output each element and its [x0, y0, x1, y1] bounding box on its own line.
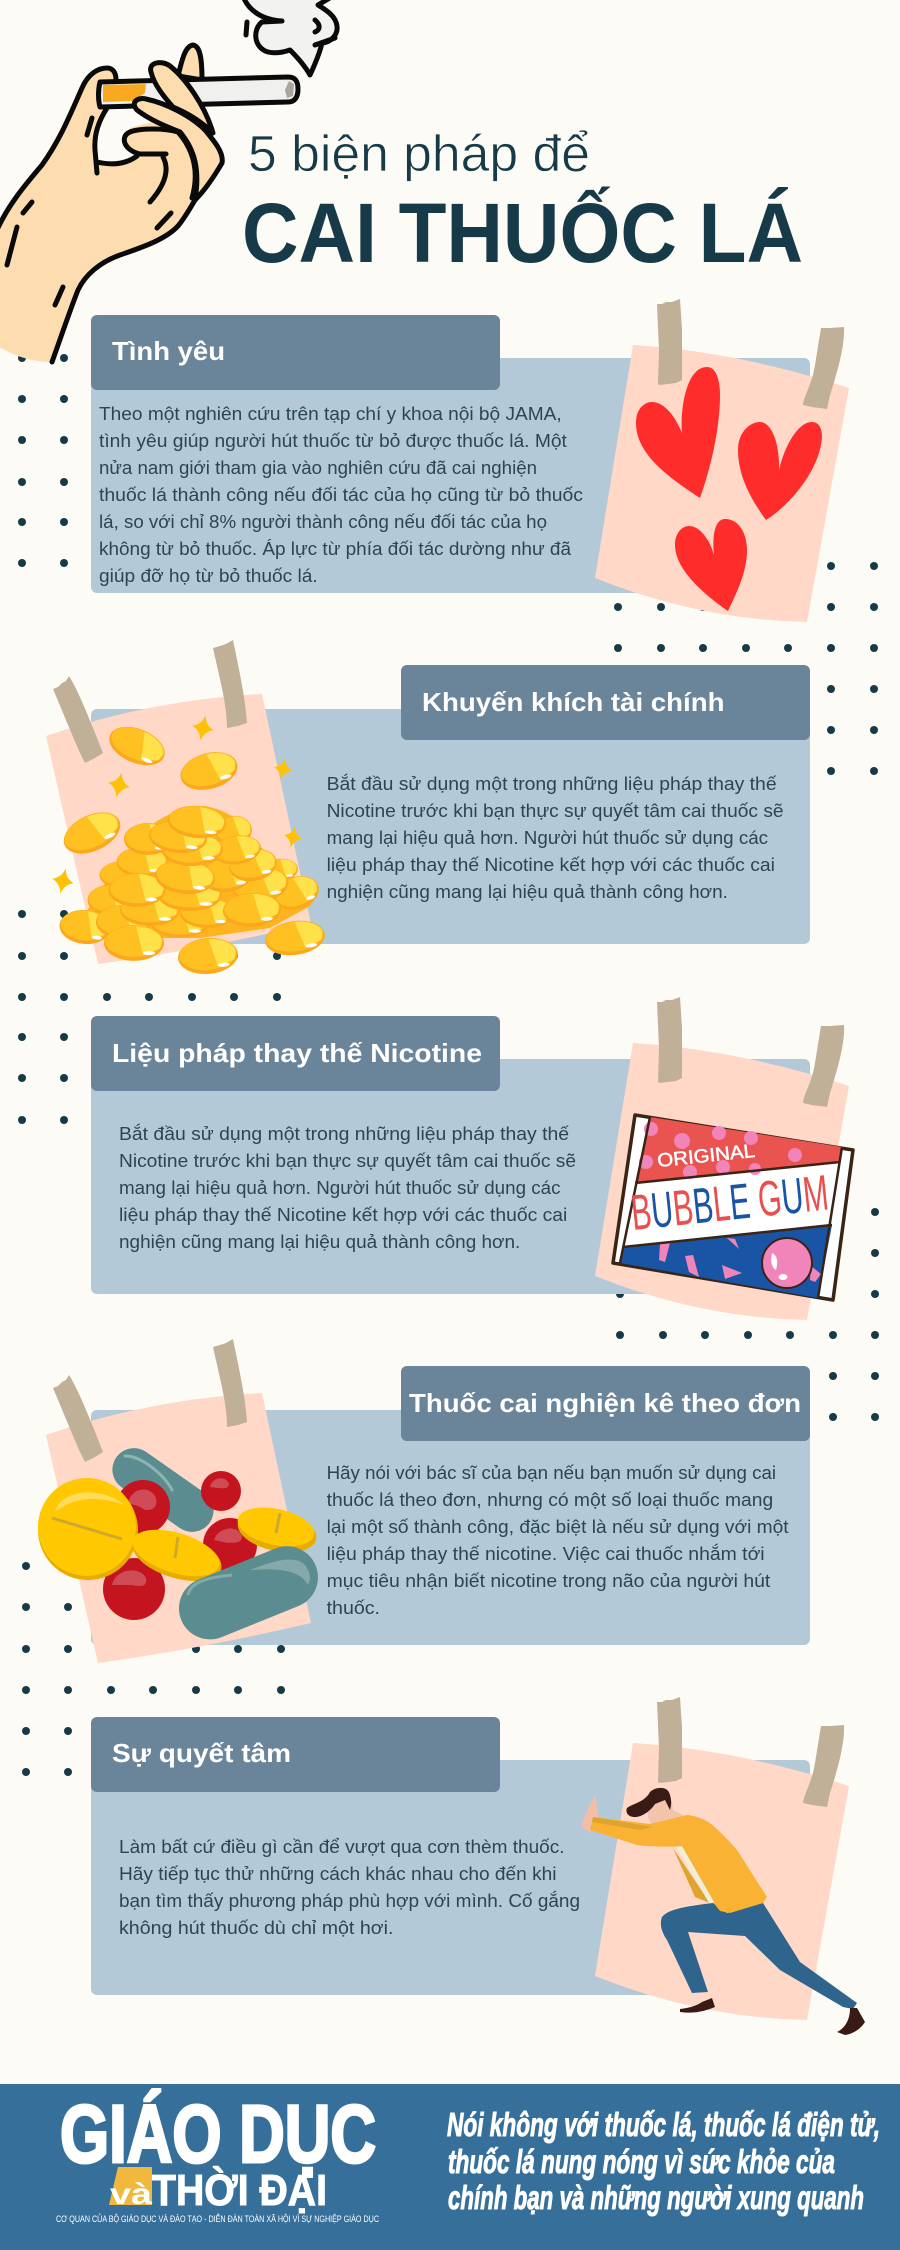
heading: Tình yêu — [91, 315, 500, 390]
text block: Liệu pháp thay thế Nicotine: mang lại hiệu quả hơn. Người hút thuốc sử dụng các — [119, 1177, 560, 1198]
panel: Khuyến khích tài chính — [46, 640, 810, 976]
title: 5 biện pháp để — [248, 125, 590, 182]
icon: bubble gum pack: BUBBLE GUM — [628, 1165, 831, 1241]
heading: Sự quyết tâm: Sự quyết tâm — [112, 1738, 291, 1768]
text block: Khuyến khích tài chính: Nicotine trước khi bạn thực sự quyết tâm cai thuốc sẽ — [327, 800, 784, 821]
panel: Thuốc cai nghiện kê theo đơn — [38, 1339, 810, 1663]
text block: Khuyến khích tài chính: Bắt đầu sử dụng một trong những liệu pháp thay thế — [327, 773, 777, 794]
text block: Sự quyết tâm: không hút thuốc dù chỉ một hơi. — [119, 1917, 393, 1938]
text block: Liệu pháp thay thế Nicotine: Bắt đầu sử dụng một trong những liệu pháp thay thế — [119, 1123, 570, 1144]
text block: Thuốc cai nghiện kê theo đơn: thuốc lá theo đơn, nhưng có một số loại thuốc mang — [327, 1489, 773, 1510]
text block: Thuốc cai nghiện kê theo đơn: mục tiêu nhận biết nicotine trong não của người hút — [327, 1570, 770, 1591]
panel: Tình yêu — [91, 299, 849, 622]
icon: pills — [38, 1440, 327, 1649]
text block: Khuyến khích tài chính — [327, 773, 784, 902]
text block: Tình yêu: Theo một nghiên cứu trên tạp chí y khoa nội bộ JAMA, — [99, 403, 562, 424]
yellow box — [109, 2167, 152, 2205]
text block: Liệu pháp thay thế Nicotine: nghiện cũng mang lại hiệu quả thành công hơn. — [119, 1231, 520, 1252]
text block: Tình yêu: nửa nam giới tham gia vào nghiên cứu đã cai nghiện — [99, 457, 537, 478]
logo: Giáo dục và Thời đại: CƠ QUAN CỦA BỘ GIÁO DỤC VÀ ĐÀO TẠO - DIỄN ĐÀN TOÀN XÃ HỘI VÌ SỰ NGHIỆP GIÁO DỤC — [56, 2213, 379, 2225]
icon: hand holding cigarette — [0, 45, 298, 362]
footer band — [0, 2084, 900, 2250]
text block: Liệu pháp thay thế Nicotine: Nicotine trước khi bạn thực sự quyết tâm cai thuốc sẽ — [119, 1150, 576, 1171]
text block: Thuốc cai nghiện kê theo đơn — [327, 1462, 789, 1618]
icon: smoke cloud — [243, 0, 337, 75]
heading: Liệu pháp thay thế Nicotine: Liệu pháp thay thế Nicotine — [112, 1038, 482, 1068]
icon: bubble gum pack: ORIGINAL — [656, 1141, 756, 1172]
logo: Giáo dục và Thời đại: THỜI ĐẠI — [152, 2165, 327, 2215]
logo: Giáo dục và Thời đại — [56, 2089, 379, 2225]
text block: Thuốc cai nghiện kê theo đơn: liệu pháp thay thế nicotine. Việc cai thuốc nhắm tới — [327, 1543, 765, 1564]
heading: Khuyến khích tài chính — [401, 665, 810, 740]
text block: Thuốc cai nghiện kê theo đơn: thuốc. — [327, 1597, 380, 1618]
text block: Sự quyết tâm: Hãy tiếp tục thử những cách khác nhau cho đến khi — [119, 1863, 556, 1884]
heading: Khuyến khích tài chính: Khuyến khích tài chính — [422, 687, 724, 717]
text block: Khuyến khích tài chính: mang lại hiệu quả hơn. Người hút thuốc sử dụng các — [327, 827, 768, 848]
text block: Tình yêu: lá, so với chỉ 8% người thành công nếu đối tác của họ — [99, 511, 547, 532]
text block: Liệu pháp thay thế Nicotine: liệu pháp thay thế Nicotine kết hợp với các thuốc cai — [119, 1204, 567, 1225]
text block: Tình yêu: tình yêu giúp người hút thuốc từ bỏ được thuốc lá. Một — [99, 430, 567, 451]
heading: Sự quyết tâm — [91, 1717, 500, 1792]
panel: Sự quyết tâm — [91, 1697, 865, 2035]
logo: Giáo dục và Thời đại: GIÁO DỤC — [60, 2089, 376, 2180]
dot pattern — [18, 354, 879, 1776]
note paper with tape — [595, 299, 849, 622]
icon: bubble gum pack — [613, 1115, 853, 1300]
note paper with tape — [46, 1339, 311, 1663]
title — [242, 125, 803, 280]
text block: Thuốc cai nghiện kê theo đơn: lại một số thành công, đặc biệt là nếu sử dụng với một — [327, 1516, 789, 1537]
heading: Tình yêu: Tình yêu — [112, 336, 225, 366]
heading: Thuốc cai nghiện kê theo đơn: Thuốc cai nghiện kê theo đơn — [409, 1388, 801, 1418]
icon: cigarette — [98, 77, 298, 107]
slogan — [447, 2106, 880, 2216]
logo: Giáo dục và Thời đại: và — [110, 2178, 152, 2211]
text block: Sự quyết tâm: bạn tìm thấy phương pháp phù hợp với mình. Cố gắng — [119, 1890, 580, 1911]
heading: Thuốc cai nghiện kê theo đơn — [401, 1366, 810, 1441]
icon: man pushing — [581, 1788, 865, 2035]
text block: Khuyến khích tài chính: nghiện cũng mang lại hiệu quả thành công hơn. — [327, 881, 728, 902]
text block: Sự quyết tâm: Làm bất cứ điều gì cần để vượt qua cơn thèm thuốc. — [119, 1836, 564, 1857]
title: CAI THUỐC LÁ — [242, 186, 803, 280]
note paper with tape — [595, 997, 849, 1320]
note paper with tape — [46, 640, 311, 964]
text block: Tình yêu — [99, 403, 583, 586]
note paper with tape — [595, 1697, 849, 2020]
text block: Tình yêu: thuốc lá thành công nếu đối tác của họ cũng từ bỏ thuốc — [99, 484, 583, 505]
text block: Thuốc cai nghiện kê theo đơn: Hãy nói với bác sĩ của bạn nếu bạn muốn sử dụng cai — [327, 1462, 776, 1483]
icon: gold coins — [50, 713, 327, 976]
panel: Liệu pháp thay thế Nicotine — [91, 997, 853, 1320]
heading: Liệu pháp thay thế Nicotine — [91, 1016, 500, 1091]
text block: Tình yêu: giúp đỡ họ từ bỏ thuốc lá. — [99, 565, 318, 586]
text block: Tình yêu: không từ bỏ thuốc. Áp lực từ phía đối tác dường như đã — [99, 538, 572, 559]
text block: Liệu pháp thay thế Nicotine — [119, 1123, 576, 1252]
text block: Khuyến khích tài chính: liệu pháp thay thế Nicotine kết hợp với các thuốc cai — [327, 854, 775, 875]
text block: Sự quyết tâm — [119, 1836, 580, 1938]
icon: hearts — [636, 367, 822, 611]
